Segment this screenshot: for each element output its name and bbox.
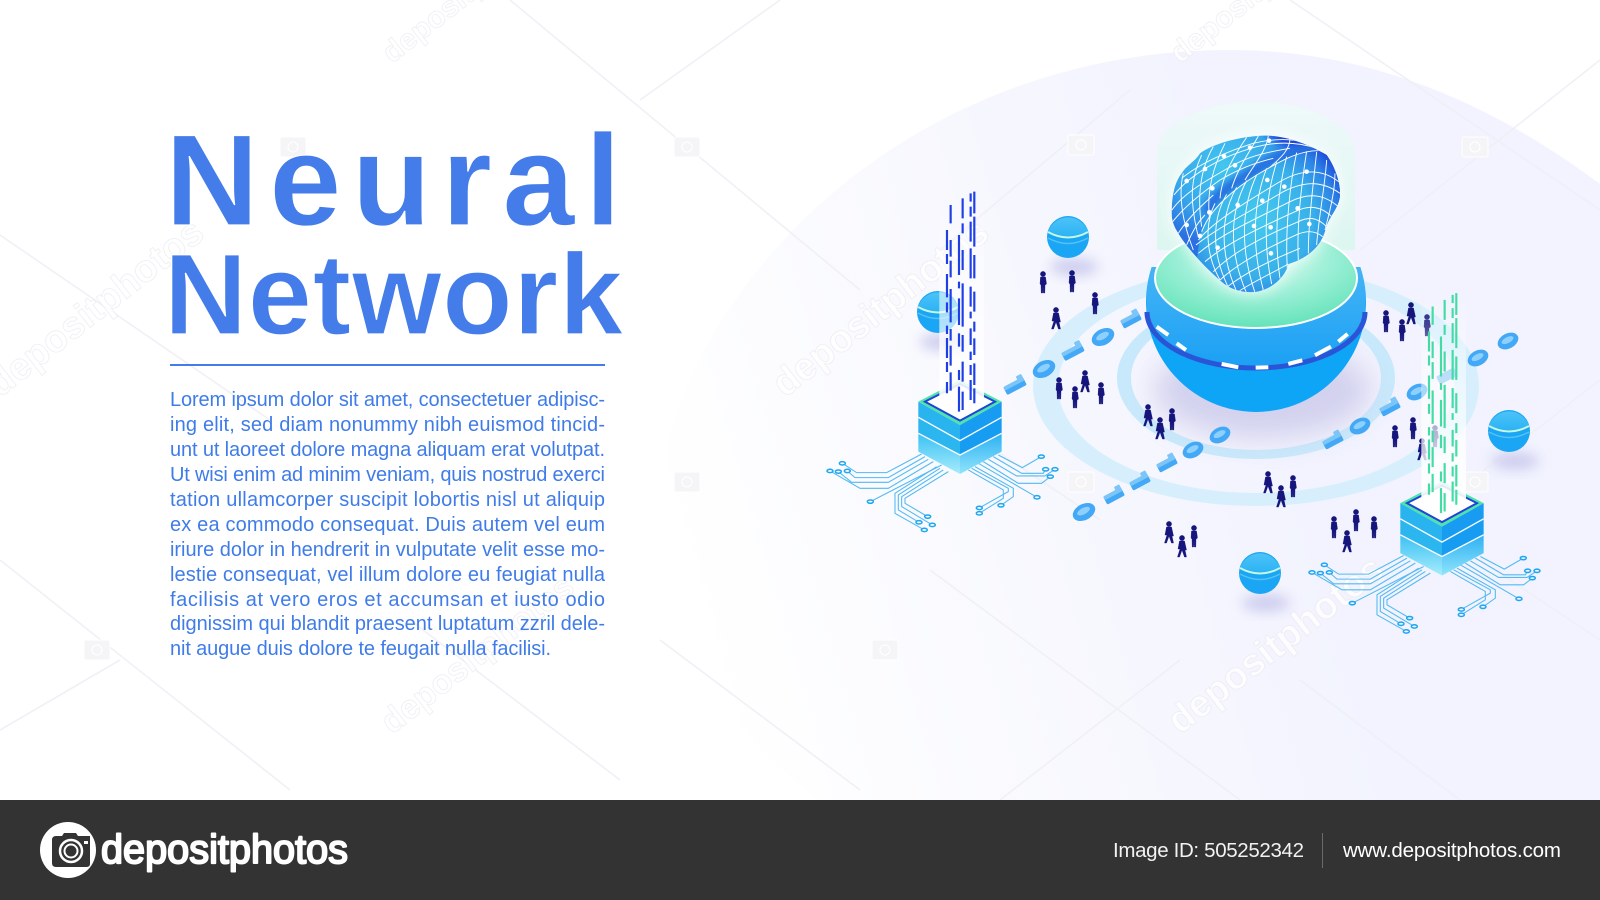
body text paragraph: unt ut laoreet dolore magna aliquam erat volutpat.: [170, 439, 605, 461]
body text paragraph: ex ea commodo consequat. Duis autem vel eum: [170, 514, 605, 536]
brain front lobe: [1197, 151, 1343, 293]
body text paragraph: facilisis at vero eros et accumsan et iusto odio: [170, 589, 605, 611]
watermark: depositphotos: [374, 567, 581, 741]
floating ball: top: [1047, 216, 1098, 276]
body text paragraph: ing elit, sed diam nonummy nibh euismod tincid-: [170, 414, 605, 436]
sphere upper band: [1146, 267, 1366, 368]
floating ball: right: [1488, 410, 1539, 470]
outer ring: [1033, 266, 1479, 506]
brain back shading: [1264, 136, 1337, 176]
box: [1400, 481, 1484, 575]
equator band: [1147, 312, 1365, 368]
background blob: [650, 50, 1600, 800]
body text paragraph: tation ullamcorper suscipit lobortis nisl ut aliquip: [170, 489, 605, 511]
brain mesh: [1172, 136, 1340, 293]
footer logo wordmark: depositphotos: [101, 826, 348, 872]
brain: [1163, 130, 1347, 297]
body text paragraph: Lorem ipsum dolor sit amet, consectetuer adipisc-: [170, 389, 605, 411]
footer logo icon: [40, 822, 96, 878]
circuit terminals: [827, 455, 1058, 532]
sphere mouth: [1155, 228, 1357, 328]
data beam: [1421, 291, 1466, 508]
binary stream: upper chain: [1002, 308, 1142, 395]
data dashes: [947, 192, 974, 412]
brain nodes: [1184, 138, 1312, 256]
title underline: [170, 364, 605, 366]
data beam: [939, 190, 984, 407]
floating ball: bottom: [1239, 552, 1290, 612]
inner ring: [1117, 297, 1395, 459]
footer bar: [0, 800, 1600, 900]
data dashes: [1429, 293, 1456, 513]
body text paragraph: nit augue duis dolore te feugait nulla facilisi.: [170, 638, 551, 660]
circuit terminals: [1309, 556, 1540, 633]
watermark: [0, 0, 1392, 742]
body text paragraph: dignissim qui blandit praesent luptatum zzril dele-: [170, 613, 605, 635]
brain crease shading: [1207, 148, 1320, 213]
body text paragraph: lestie consequat, vel illum dolore eu feugiat nulla: [170, 564, 606, 586]
brain back lobe: [1172, 136, 1340, 292]
circuit traces: [1312, 555, 1537, 631]
body text paragraph: iriure dolor in hendrerit in vulputate velit esse mo-: [170, 539, 605, 561]
left tower with circuit: [827, 190, 1058, 532]
body text paragraph: Ut wisi enim ad minim veniam, quis nostrud exerci: [170, 464, 605, 486]
glass cylinder: [1157, 102, 1355, 250]
central sphere: [1146, 228, 1366, 412]
right tower with circuit: [1309, 291, 1540, 633]
image id: Image ID: 505252342: [1113, 839, 1304, 862]
website url: www.depositphotos.com: [1342, 839, 1561, 862]
footer divider: [1322, 833, 1323, 868]
title line: Neural: Neural: [165, 107, 621, 253]
title line: Network: Network: [164, 231, 624, 359]
circuit traces: [830, 454, 1055, 530]
floating ball: left: [917, 291, 968, 351]
watermark: depositphotos: [765, 211, 997, 405]
binary stream: lower chain: [1070, 329, 1521, 525]
sphere shadow: [1154, 342, 1370, 438]
watermark: depositphotos: [1160, 548, 1392, 742]
people silhouettes: [1040, 270, 1438, 557]
title: Neural Network: [164, 107, 624, 359]
body text paragraph: [170, 389, 606, 660]
sphere body: [1146, 267, 1366, 412]
box: [918, 380, 1002, 474]
